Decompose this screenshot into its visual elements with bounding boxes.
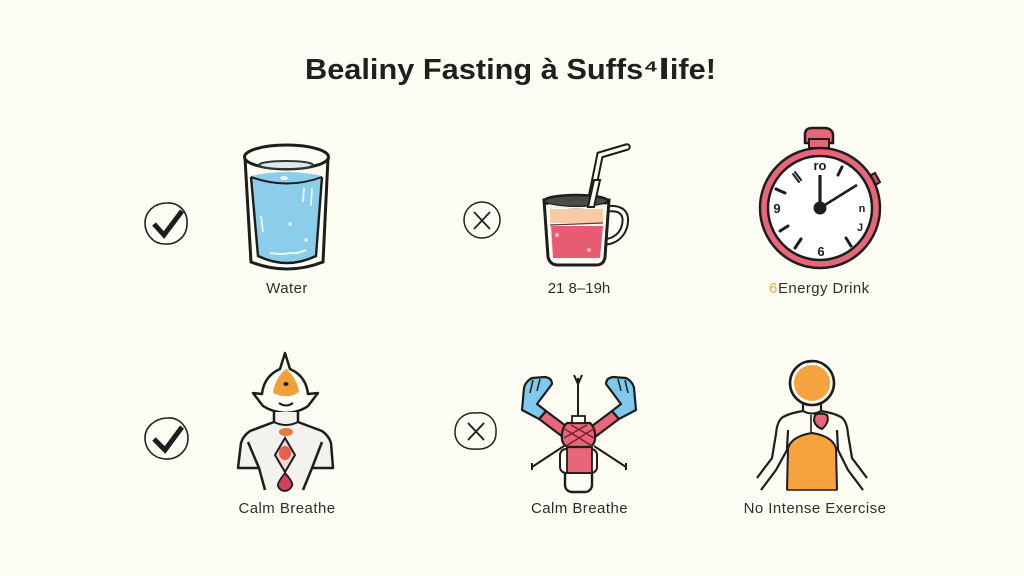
- icon: stopwatch: J: [857, 222, 863, 234]
- icon: drink with straw: [544, 147, 627, 265]
- label: water: Water: [266, 280, 308, 297]
- title: Bealiny Fasting à Suffs⁴ⵏife!: [305, 54, 716, 86]
- icon: glass of water: [244, 145, 328, 269]
- icon: stopwatch: [760, 128, 880, 268]
- label: calm breathe middle: Calm Breathe: [531, 500, 628, 517]
- icon: check mark top: [145, 203, 187, 244]
- label: energy drink: 6: [769, 280, 777, 297]
- icon: cross top: [464, 202, 500, 238]
- icon: stopwatch: ro: [814, 158, 827, 173]
- label: no intense exercise: No Intense Exercise: [744, 500, 886, 517]
- icon: cross bottom: [455, 413, 496, 449]
- icon: stopwatch: 9: [773, 201, 781, 216]
- icon: person with heart: [757, 361, 867, 490]
- icon: stopwatch: 6: [817, 244, 825, 259]
- label: calm breathe left: Calm Breathe: [238, 500, 336, 517]
- icon: crossed-out exercise figure: [522, 375, 636, 492]
- icon: check mark bottom: [145, 418, 188, 459]
- icon: calm person figure: [238, 353, 333, 491]
- label: time range: 21 8–19h: [548, 280, 610, 297]
- icon: stopwatch: n: [859, 203, 866, 215]
- label: energy drink: Energy Drink: [778, 280, 870, 297]
